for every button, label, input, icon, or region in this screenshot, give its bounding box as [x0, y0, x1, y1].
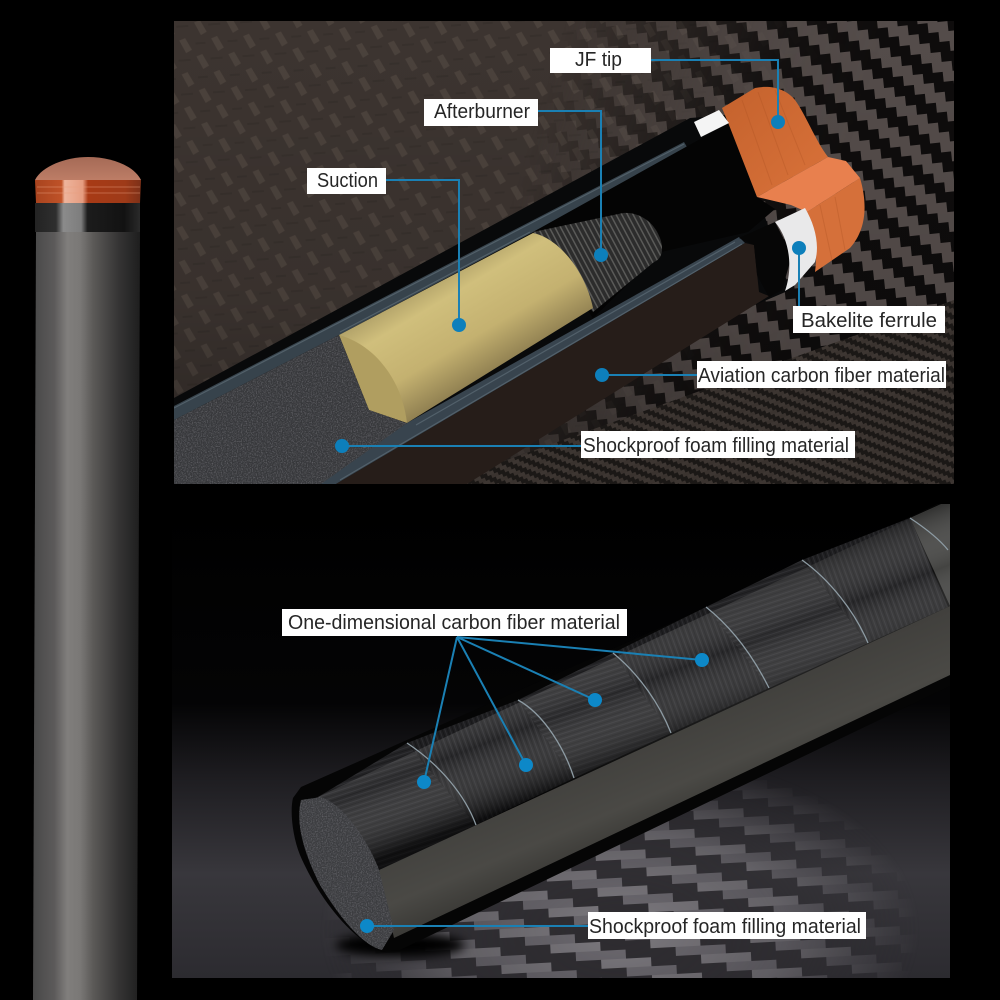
label: Afterburner [424, 99, 608, 262]
label: Afterburner: Afterburner [434, 101, 530, 123]
black inner bore [533, 146, 774, 232]
carbon wall band [174, 142, 745, 484]
black ferrule base [739, 222, 792, 297]
small white ferrule [694, 110, 729, 137]
label: Suction [307, 168, 466, 332]
label: JF tip [550, 48, 785, 129]
label: JF tip: JF tip [575, 49, 622, 71]
wood tip lower half [807, 178, 865, 272]
carbon weave background [174, 21, 954, 484]
panel: cross section of shaft [174, 21, 954, 484]
cue shadow [335, 933, 465, 957]
outer wall of shaft [174, 115, 790, 484]
suction gold cylinder [339, 233, 593, 423]
shaft outer black edge [292, 723, 872, 939]
wood grain lines [742, 90, 845, 260]
label: Suction: Suction [317, 170, 378, 192]
dark interior lining: aviation carbon fiber [336, 243, 769, 484]
shockproof foam [174, 335, 407, 484]
panel: fiber layers of shaft [172, 498, 950, 978]
label: One-dimensional carbon fiber material: One-dimensional carbon fiber material [288, 612, 620, 634]
suction end cap [339, 335, 407, 423]
bakelite ferrule [775, 208, 817, 291]
cue shaft photo [33, 157, 141, 1000]
label: Shockproof foam filling material [335, 431, 855, 458]
label: Shockproof foam filling material: Shockproof foam filling material [583, 435, 849, 457]
wood tip upper half [722, 87, 828, 197]
carbon weave floor [351, 783, 896, 978]
label: One-dimensional carbon fiber material [282, 609, 709, 789]
label: Aviation carbon fiber material: Aviation carbon fiber material [698, 365, 945, 387]
label: Shockproof foam filling material (lower): Shockproof foam filling material [589, 916, 861, 938]
flat gray cut face [379, 606, 950, 938]
afterburner cylinder [533, 213, 662, 312]
shaft body [33, 232, 140, 1000]
layer seam lines [407, 518, 948, 825]
label: Aviation carbon fiber material [595, 361, 946, 388]
dark gradient background [172, 711, 950, 978]
foam end face [299, 797, 394, 950]
label: Bakelite ferrule: Bakelite ferrule [801, 310, 937, 332]
layered red tip [35, 180, 141, 203]
label: Shockproof foam filling material (lower) [360, 912, 866, 939]
label: Bakelite ferrule [792, 241, 945, 333]
black collar [35, 203, 140, 232]
domed leather tip [35, 157, 141, 180]
wood tip lower top face [757, 157, 860, 212]
carbon fiber layers [318, 500, 950, 870]
